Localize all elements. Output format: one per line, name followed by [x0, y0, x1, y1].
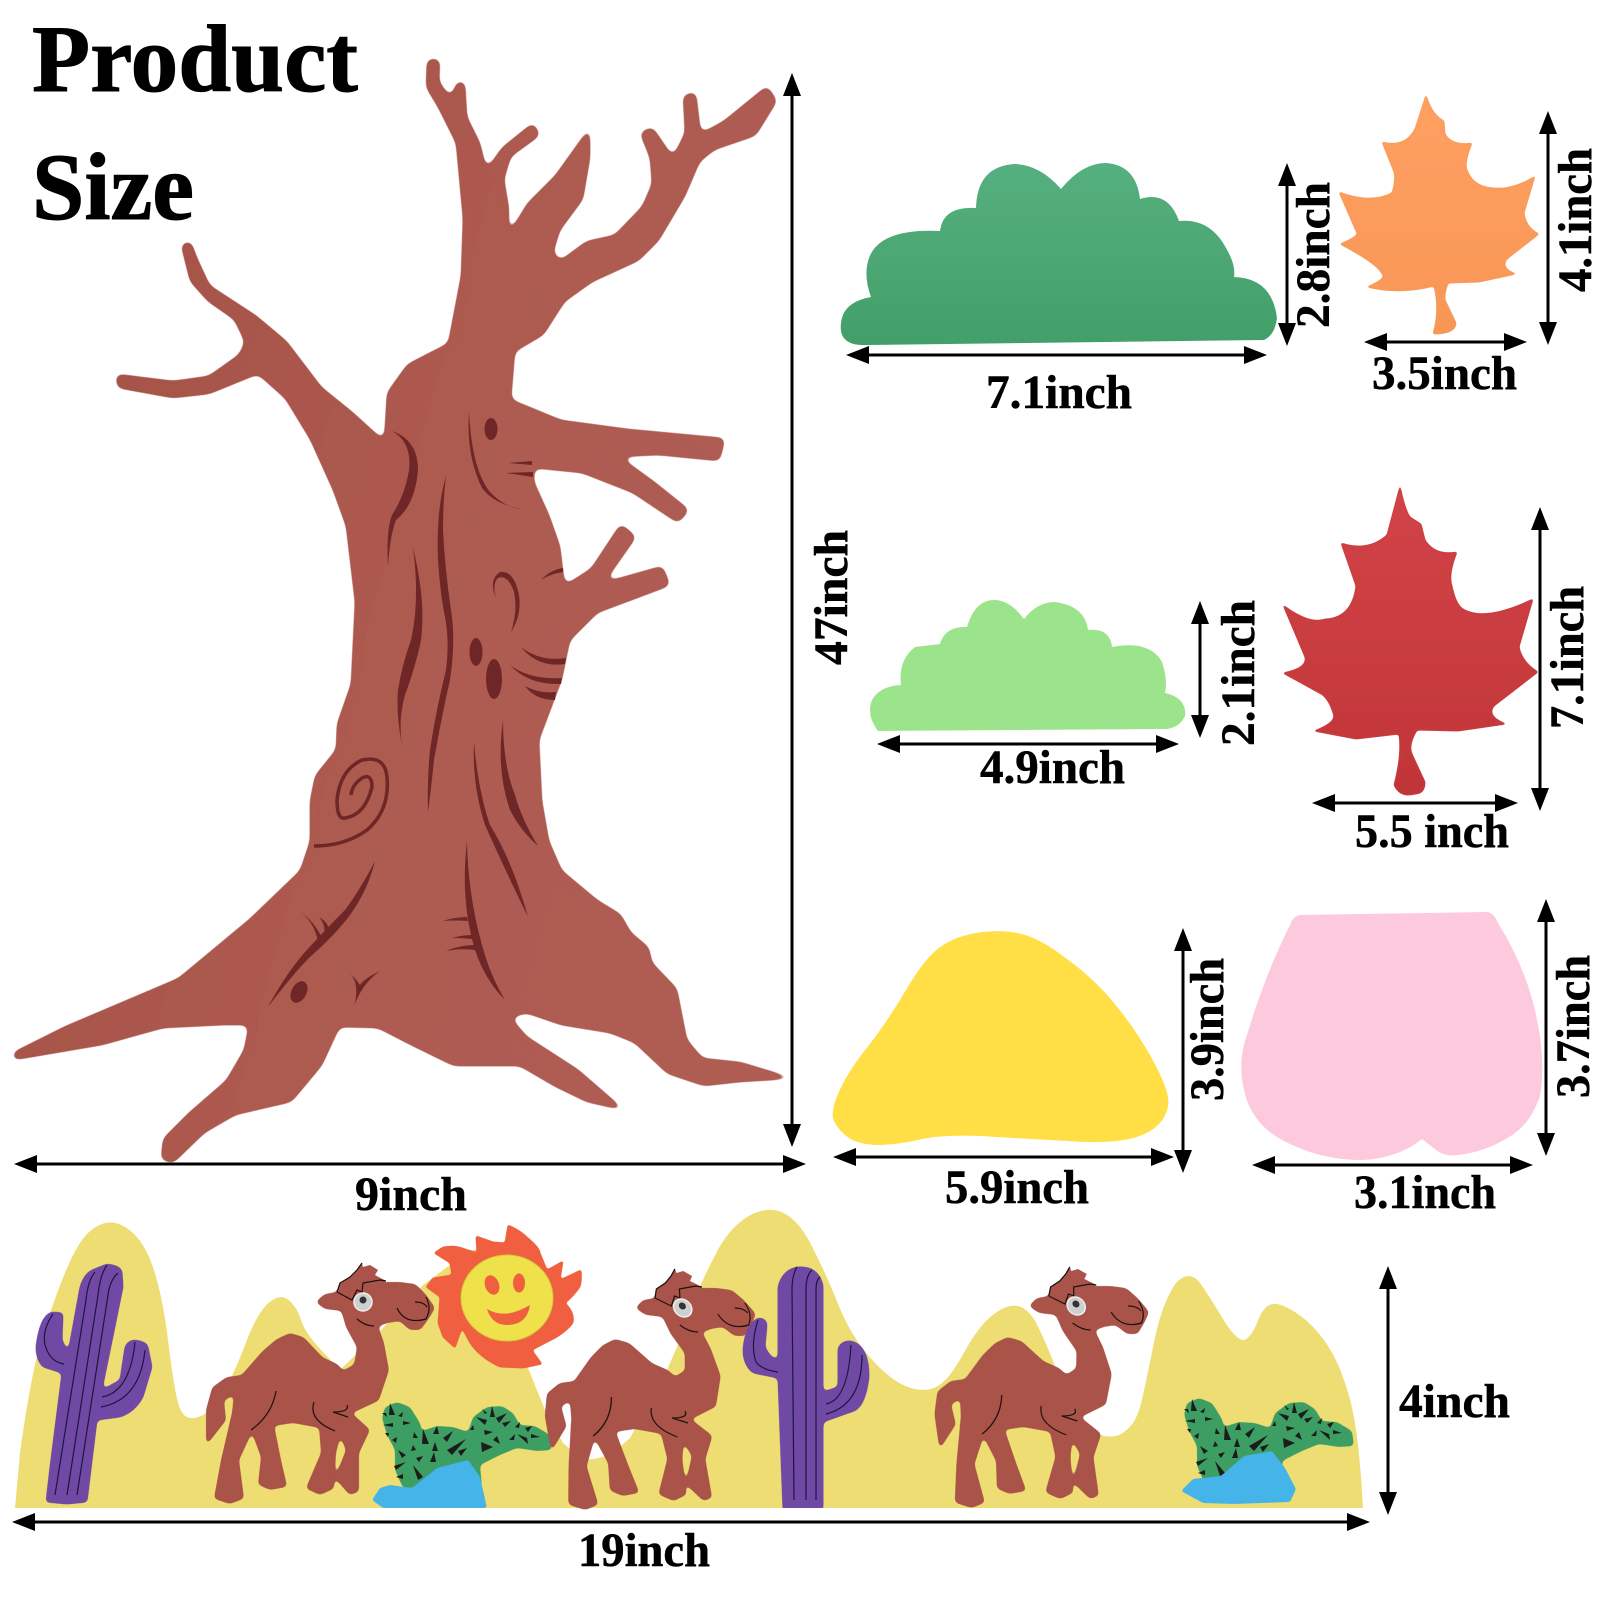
- dark green bush: [841, 163, 1277, 345]
- arrow: pink shape width: [1252, 1156, 1533, 1174]
- label: tree height: 47inch: [805, 530, 858, 665]
- label: tree width: 9inch: [355, 1168, 467, 1221]
- camel left: [207, 1263, 434, 1503]
- sand hills: [15, 1210, 1363, 1508]
- red leaf: [1283, 486, 1538, 795]
- arrow: orange leaf height: [1539, 111, 1557, 345]
- green cactus middle: [382, 1402, 552, 1488]
- tree: [14, 60, 790, 1162]
- pink shape: [1241, 912, 1542, 1160]
- label: orange leaf width: 3.5inch: [1372, 347, 1517, 400]
- label: dark bush height: 2.8inch: [1287, 182, 1340, 328]
- arrow: desert height: [1379, 1266, 1397, 1515]
- arrow: red leaf height: [1531, 507, 1549, 811]
- arrow: orange leaf width: [1364, 333, 1527, 351]
- light green bush: [870, 600, 1185, 731]
- label: pink shape height: 3.7inch: [1547, 955, 1600, 1098]
- label: yellow mound width: 5.9inch: [945, 1161, 1089, 1214]
- label: pink shape width: 3.1inch: [1354, 1166, 1496, 1219]
- arrow: red leaf width: [1312, 794, 1518, 812]
- arrow: light bush width: [877, 735, 1179, 753]
- sun: [426, 1225, 581, 1368]
- arrow: tree width: [14, 1155, 806, 1173]
- purple cactus left: [36, 1264, 152, 1504]
- water pool middle: [372, 1460, 487, 1508]
- label: dark bush width: 7.1inch: [986, 366, 1132, 419]
- arrow: tree height: [783, 73, 801, 1147]
- arrow: light bush height: [1191, 601, 1209, 738]
- title: Product: [32, 6, 358, 112]
- arrow: dark bush height: [1278, 163, 1296, 346]
- yellow mound: [833, 931, 1168, 1145]
- label: yellow mound height: 3.9inch: [1181, 958, 1234, 1101]
- orange leaf: [1339, 95, 1539, 334]
- arrow: desert width: [12, 1513, 1370, 1531]
- label: red leaf height: 7.1inch: [1541, 586, 1594, 729]
- arrow: dark bush width: [846, 346, 1267, 364]
- purple cactus middle: [743, 1267, 869, 1516]
- arrow: pink shape height: [1537, 899, 1555, 1156]
- arrow: yellow mound height: [1174, 928, 1192, 1173]
- green cactus right: [1184, 1398, 1354, 1484]
- desert border strip: [15, 1210, 1363, 1516]
- label: desert height: 4inch: [1399, 1375, 1510, 1428]
- title: Size: [32, 134, 194, 240]
- water pool right: [1181, 1451, 1296, 1504]
- camel right: [915, 1267, 1175, 1507]
- arrow: yellow mound width: [833, 1148, 1174, 1166]
- label: light bush height: 2.1inch: [1212, 600, 1265, 746]
- title: [32, 6, 358, 240]
- label: light bush width: 4.9inch: [980, 741, 1125, 794]
- label: red leaf width: 5.5 inch: [1355, 805, 1509, 858]
- label: desert width: 19inch: [578, 1524, 710, 1577]
- camel middle: [520, 1269, 789, 1509]
- tree bark markings: [268, 412, 566, 1012]
